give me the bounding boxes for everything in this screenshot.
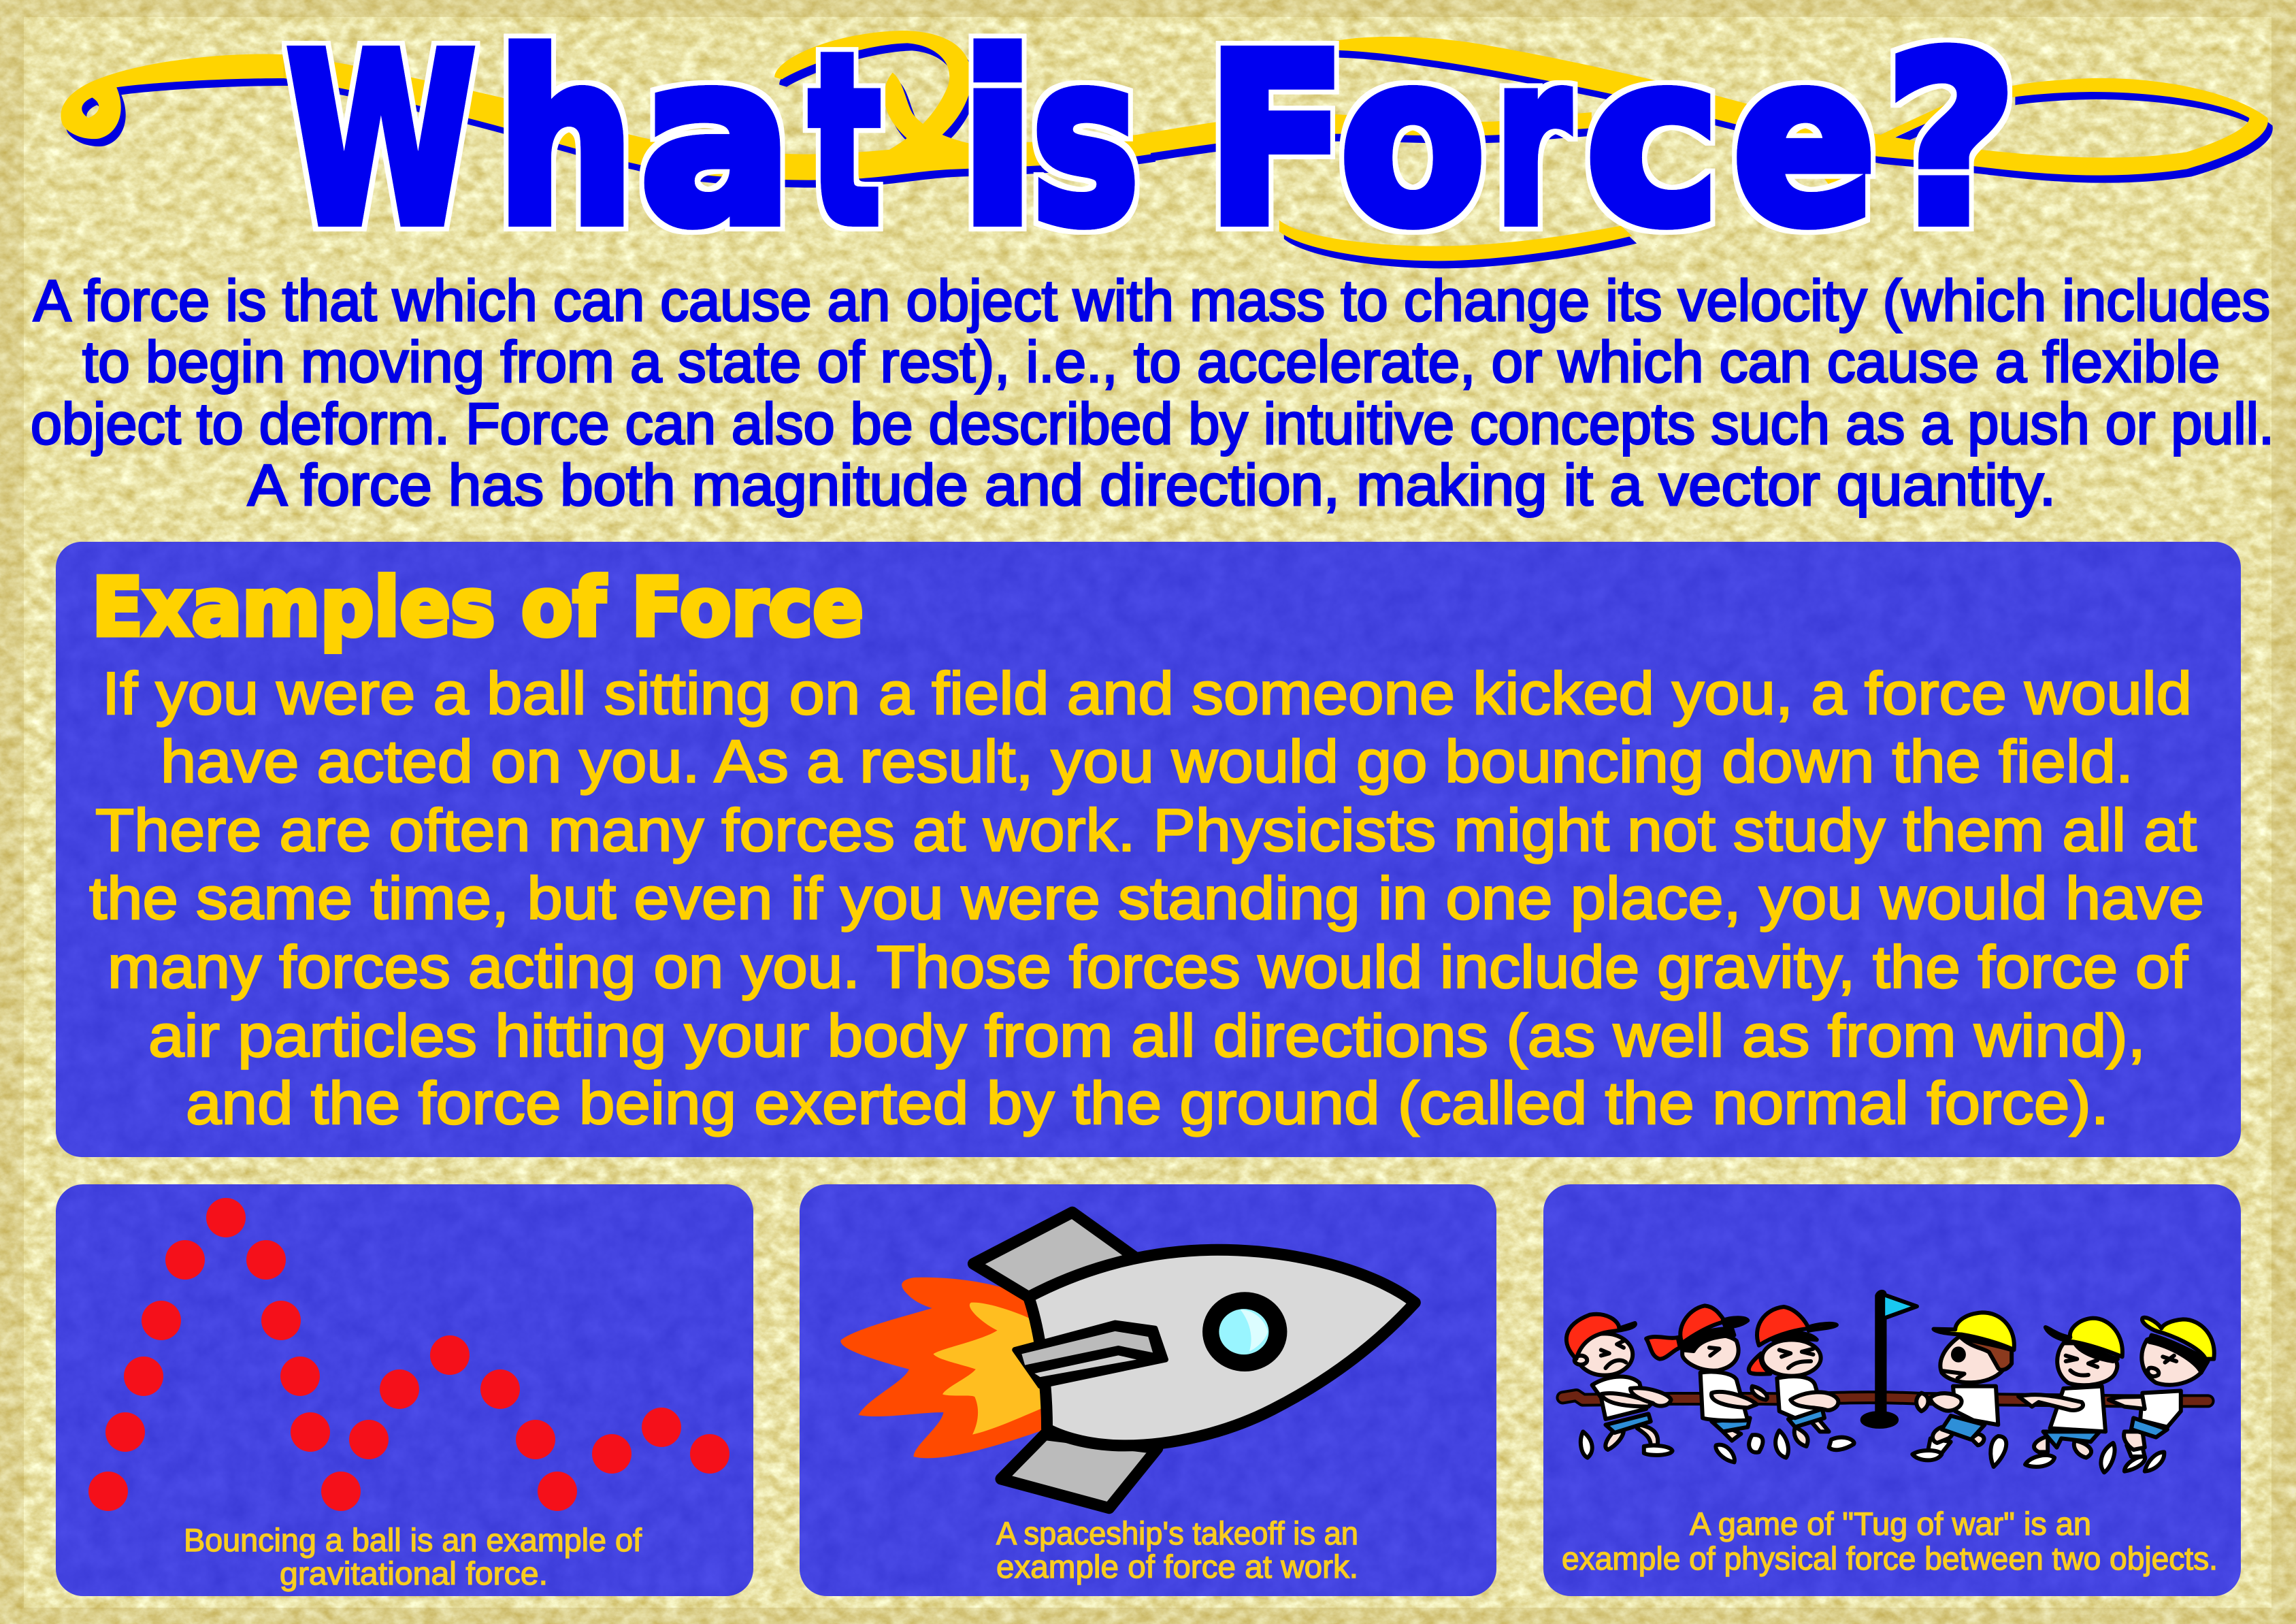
- panel: tug of war: [1543, 1184, 2241, 1596]
- title: o: [1340, 5, 1486, 276]
- intro text block: A force has both magnitude and direction, making it a vector quantity.: [248, 453, 2056, 518]
- caption: rocket: A spaceship's takeoff is an: [996, 1515, 1358, 1551]
- caption: rocket: example of force at work.: [996, 1548, 1358, 1585]
- title: W: [286, 5, 476, 276]
- examples body text: air particles hitting your body from all directions (as well as from wind),: [148, 1002, 2146, 1069]
- examples body text: many forces acting on you. Those forces would include gravity, the force of: [108, 933, 2188, 1001]
- title: t: [809, 5, 881, 276]
- caption: bouncing ball: [184, 1522, 642, 1591]
- examples body text: the same time, but even if you were standing in one place, you would have: [89, 864, 2204, 932]
- intro text block: to begin moving from a state of rest), i.e., to accelerate, or which can cause a flexible: [82, 330, 2220, 395]
- title: h: [497, 5, 634, 276]
- panel: bouncing ball: [56, 1184, 753, 1596]
- caption: rocket: [996, 1515, 1358, 1585]
- panel: examples of force: [56, 542, 2241, 1157]
- title: s: [1032, 5, 1139, 276]
- decorative title ribbon: [61, 31, 2273, 268]
- examples body text: [89, 660, 2204, 1137]
- panel: rocket: [800, 1184, 1496, 1596]
- caption: bouncing ball: Bouncing a ball is an example of: [184, 1522, 642, 1558]
- caption: tug of war: example of physical force between two objects.: [1562, 1540, 2218, 1576]
- caption: tug of war: A game of "Tug of war" is an: [1690, 1506, 2091, 1542]
- intro text block: [31, 269, 2274, 518]
- title: e: [1733, 5, 1876, 276]
- heading: examples of force: Examples of Force: [92, 560, 864, 654]
- caption: bouncing ball: gravitational force.: [280, 1555, 548, 1591]
- examples body text: have acted on you. As a result, you would go bouncing down the field.: [161, 728, 2133, 795]
- caption: tug of war: [1562, 1506, 2218, 1576]
- examples body text: If you were a ball sitting on a field and someone kicked you, a force would: [102, 660, 2192, 727]
- icon: rocket: [840, 1212, 1415, 1508]
- title: F: [1207, 5, 1347, 276]
- title: c: [1586, 5, 1720, 276]
- title: i: [960, 5, 1035, 276]
- intro text block: object to deform. Force can also be described by intuitive concepts such as a push or pull.: [31, 392, 2274, 457]
- title: r: [1495, 5, 1571, 276]
- examples body text: and the force being exerted by the ground (called the normal force).: [186, 1069, 2109, 1137]
- title: a: [640, 5, 793, 276]
- title: ?: [1885, 5, 2017, 276]
- intro text block: A force is that which can cause an object with mass to change its velocity (which includes: [33, 269, 2270, 334]
- icon: tug of war children: [1562, 1291, 2214, 1472]
- examples body text: There are often many forces at work. Physicists might not study them all at: [95, 796, 2197, 864]
- chart: bouncing ball path: [88, 1198, 729, 1511]
